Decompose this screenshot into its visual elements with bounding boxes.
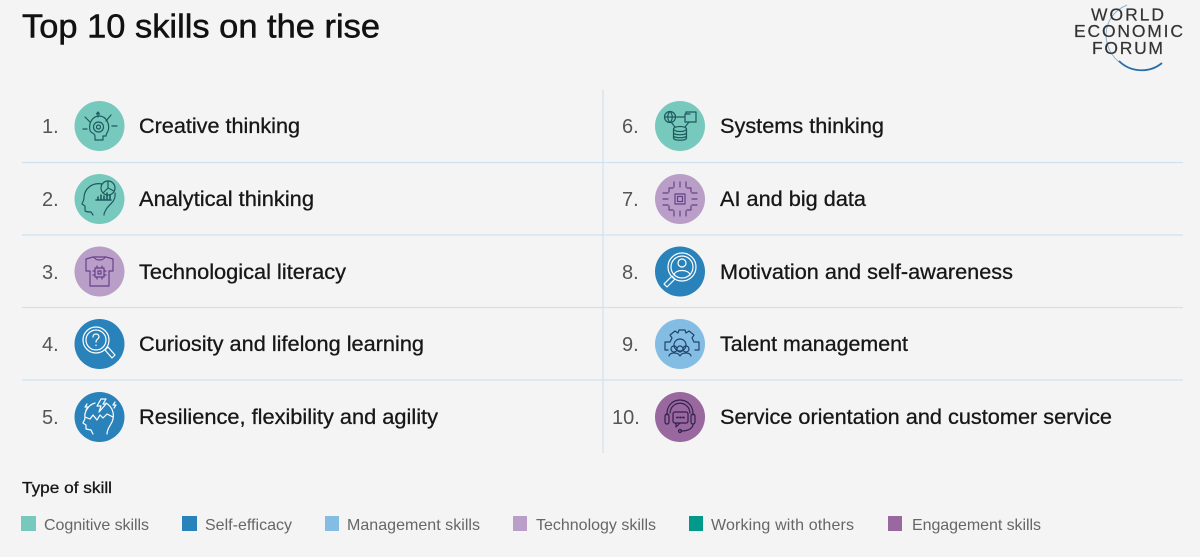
icon: globe, folder and database [664, 112, 696, 140]
legend: working with others: Working with others [711, 517, 854, 534]
skill 8: motivation and self-awareness [622, 246, 1013, 296]
skill 10: service orientation and customer service: Service orientation and customer service [720, 406, 1112, 429]
skill 3: technological literacy: 3. [42, 262, 59, 284]
skill 5: resilience, flexibility and agility: Resilience, flexibility and agility [139, 406, 439, 429]
logo: World Economic Forum [1074, 4, 1183, 70]
skill 6: systems thinking [622, 101, 884, 151]
icon: head with gear [83, 112, 117, 140]
skill 5: resilience, flexibility and agility: 5. [42, 407, 59, 429]
skill 10: service orientation and customer service [612, 392, 1112, 442]
skill 2: analytical thinking: Analytical thinking [139, 188, 314, 211]
icon: t-shirt with chip [86, 257, 113, 286]
skill 9: talent management: Talent management [720, 333, 908, 356]
legend: technology skills: Technology skills [536, 517, 656, 534]
logo: World Economic Forum: FORUM [1092, 38, 1163, 58]
title: Top 10 skills on the rise [22, 8, 380, 44]
icon: gear with people [665, 330, 699, 356]
skill 6: systems thinking: Systems thinking [720, 115, 884, 138]
skill 4: curiosity and lifelong learning [42, 319, 424, 369]
skill 4: curiosity and lifelong learning: 4. [42, 334, 59, 356]
legend heading: Type of skill [22, 480, 112, 497]
skill 8: motivation and self-awareness: 8. [622, 262, 639, 284]
skill 7: AI and big data [622, 174, 866, 224]
icon: magnifier with person [664, 253, 696, 287]
skill 7: AI and big data: AI and big data [720, 188, 866, 211]
skill 1: creative thinking [42, 101, 300, 151]
skill 3: technological literacy: Technological literacy [139, 261, 347, 284]
legend: self-efficacy: Self-efficacy [205, 517, 292, 534]
skill 1: creative thinking: Creative thinking [139, 115, 300, 138]
icon: headset with chat bubble [665, 400, 695, 432]
skill 3: technological literacy [42, 246, 347, 296]
skill 7: AI and big data: 7. [622, 189, 639, 211]
skill 9: talent management: 9. [622, 334, 639, 356]
icon: magnifier with question mark [83, 327, 115, 358]
skill 6: systems thinking: 6. [622, 116, 639, 138]
icon: processor chip [663, 182, 697, 216]
legend [21, 480, 1041, 534]
logo: World Economic Forum: WORLD [1091, 4, 1164, 24]
icon: head with chart [82, 181, 115, 215]
skill 1: creative thinking: 1. [42, 116, 59, 138]
legend: management skills: Management skills [347, 517, 480, 534]
skill 10: service orientation and customer service: 10. [612, 407, 640, 429]
logo: World Economic Forum: ECONOMIC [1074, 21, 1183, 41]
icon: head with lightning [83, 399, 116, 434]
legend: cognitive skills: Cognitive skills [44, 517, 149, 534]
skill 5: resilience, flexibility and agility [42, 392, 439, 442]
skill 8: motivation and self-awareness: Motivation and self-awareness [720, 261, 1013, 284]
skill 2: analytical thinking: 2. [42, 189, 59, 211]
skill 9: talent management [622, 319, 908, 369]
skill 4: curiosity and lifelong learning: Curiosity and lifelong learning [139, 333, 424, 356]
legend: engagement skills: Engagement skills [912, 517, 1041, 534]
skill 2: analytical thinking [42, 174, 314, 224]
